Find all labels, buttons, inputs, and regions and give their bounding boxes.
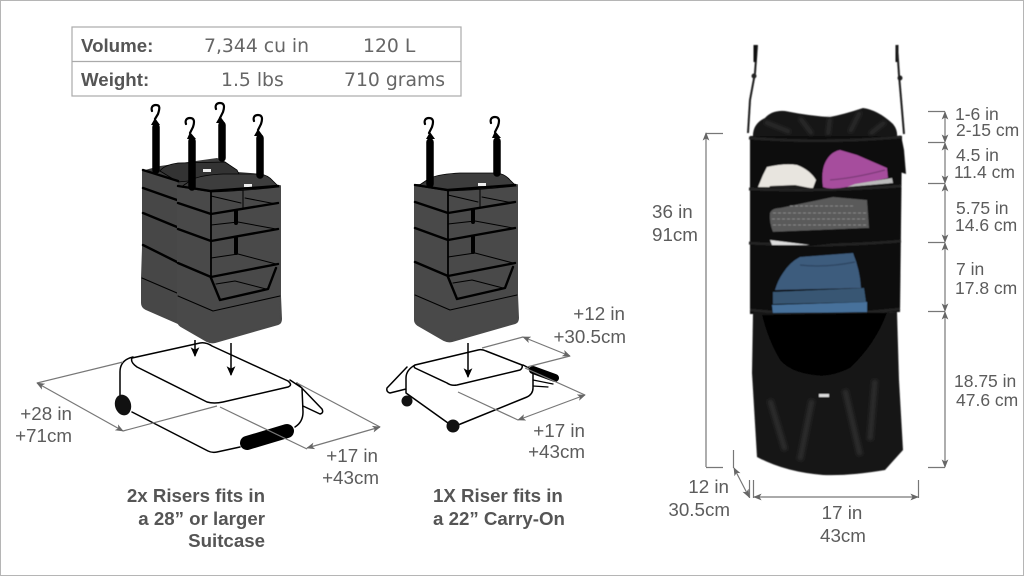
label: carry-on width: +43cm — [528, 441, 585, 462]
dimension: width — [754, 480, 918, 546]
hanging straps — [748, 45, 906, 174]
dimension: depth: 30.5cm — [668, 499, 730, 520]
hooks and straps — [151, 103, 263, 187]
back riser — [142, 158, 262, 323]
label: large suitcase length: +28 in — [20, 403, 72, 424]
grey knit sweater — [770, 197, 869, 232]
dimension: section heights: 5.75 in — [956, 198, 1009, 218]
caption: one riser: 1X Riser fits in — [433, 485, 563, 506]
white folded shirt — [758, 164, 816, 189]
label: large suitcase length: +71cm — [15, 425, 72, 446]
dimension: section heights: 4.5 in — [956, 145, 999, 165]
label: carry-on width: +17 in — [533, 420, 585, 441]
purple folded top — [822, 150, 893, 188]
dimension: depth — [668, 450, 750, 520]
dimension: section heights: 14.6 cm — [955, 215, 1017, 235]
caption: two risers — [127, 485, 265, 551]
dimension: section heights: 2-15 cm — [956, 120, 1019, 140]
dimension lines: large suitcase — [37, 362, 380, 449]
hanging bottom bag — [752, 312, 903, 475]
top compartment folds — [765, 112, 885, 135]
folded item under sweater — [770, 228, 880, 246]
arrows into large suitcase — [195, 340, 231, 375]
specifications table: 710 grams — [344, 70, 445, 91]
dimension: section heights: 11.4 cm — [954, 162, 1015, 182]
front riser — [178, 174, 281, 342]
dimension: overall height: 36 in — [652, 201, 693, 222]
label: large suitcase length — [15, 403, 72, 446]
folded jeans — [772, 253, 867, 314]
specifications table: Weight: — [81, 69, 149, 90]
dimension: width: 17 in — [822, 502, 862, 523]
shelf body — [750, 136, 902, 314]
photo: hanging shelf organizer — [748, 45, 906, 475]
label: carry-on depth: +12 in — [573, 303, 625, 324]
caption: two risers: 2x Risers fits in — [127, 485, 265, 506]
label: carry-on width — [528, 420, 585, 462]
illustration: large suitcase — [113, 343, 323, 452]
specifications table — [72, 27, 461, 96]
dimension: overall height — [652, 133, 723, 468]
dimension: section heights: 1-6 in — [955, 104, 999, 124]
dimension: overall height: 91cm — [652, 224, 698, 245]
top compartment — [753, 108, 897, 138]
arrow into carry-on — [467, 343, 469, 377]
caption: one riser — [433, 485, 565, 529]
specifications table: 7,344 cu in — [204, 36, 309, 57]
dimension: section heights: 7 in — [956, 259, 984, 279]
label: large suitcase width: +17 in — [326, 445, 378, 466]
caption: two risers: a 28” or larger — [138, 508, 265, 529]
caption: two risers: Suitcase — [188, 530, 265, 551]
illustration: single riser — [415, 117, 518, 341]
illustration: two risers stacked side by side — [142, 103, 281, 342]
dimension: depth: 12 in — [688, 476, 729, 497]
dimension: section heights: 18.75 in — [954, 371, 1016, 391]
label: carry-on depth — [553, 303, 626, 347]
dimension lines: carry-on — [458, 337, 585, 420]
specifications table: 1.5 lbs — [221, 70, 284, 91]
dimension: section heights — [928, 104, 1019, 468]
specifications table: Volume: — [81, 35, 153, 56]
specifications table: 120 L — [363, 36, 416, 57]
illustration: carry-on suitcase — [387, 350, 555, 432]
caption: one riser: a 22” Carry-On — [433, 508, 565, 529]
dimension: section heights: 17.8 cm — [955, 278, 1017, 298]
label: large suitcase width: +43cm — [322, 467, 379, 488]
label: large suitcase width — [322, 445, 379, 488]
label: carry-on depth: +30.5cm — [553, 326, 626, 347]
dimension: section heights: 47.6 cm — [956, 390, 1018, 410]
shelf bands — [749, 137, 901, 314]
dimension: width: 43cm — [820, 525, 866, 546]
